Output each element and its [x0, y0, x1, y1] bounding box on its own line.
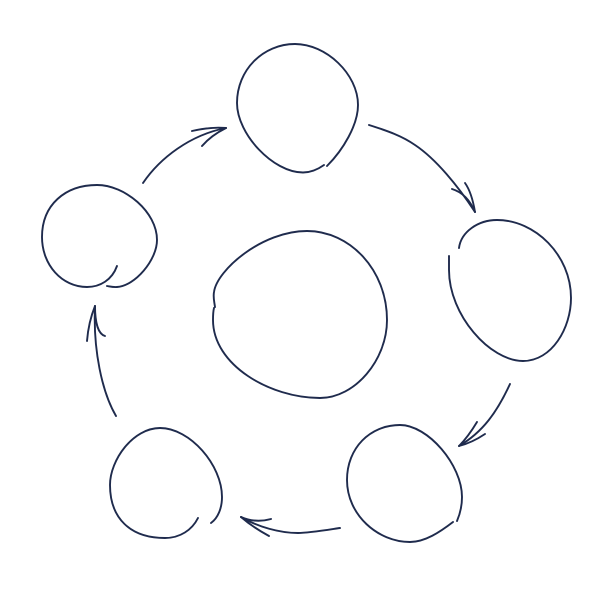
bottom left circle	[110, 428, 222, 538]
arrow: bottom left to left	[87, 306, 116, 416]
arrow: bottom right to bottom left	[241, 517, 340, 536]
arrow: top to right	[369, 125, 475, 212]
bottom right circle	[347, 425, 462, 542]
right circle	[449, 220, 571, 361]
left circle	[42, 185, 157, 287]
centre circle	[213, 231, 387, 398]
arrow: left to top	[143, 128, 226, 183]
top circle	[237, 44, 358, 172]
arrow: right to bottom right	[459, 384, 510, 446]
